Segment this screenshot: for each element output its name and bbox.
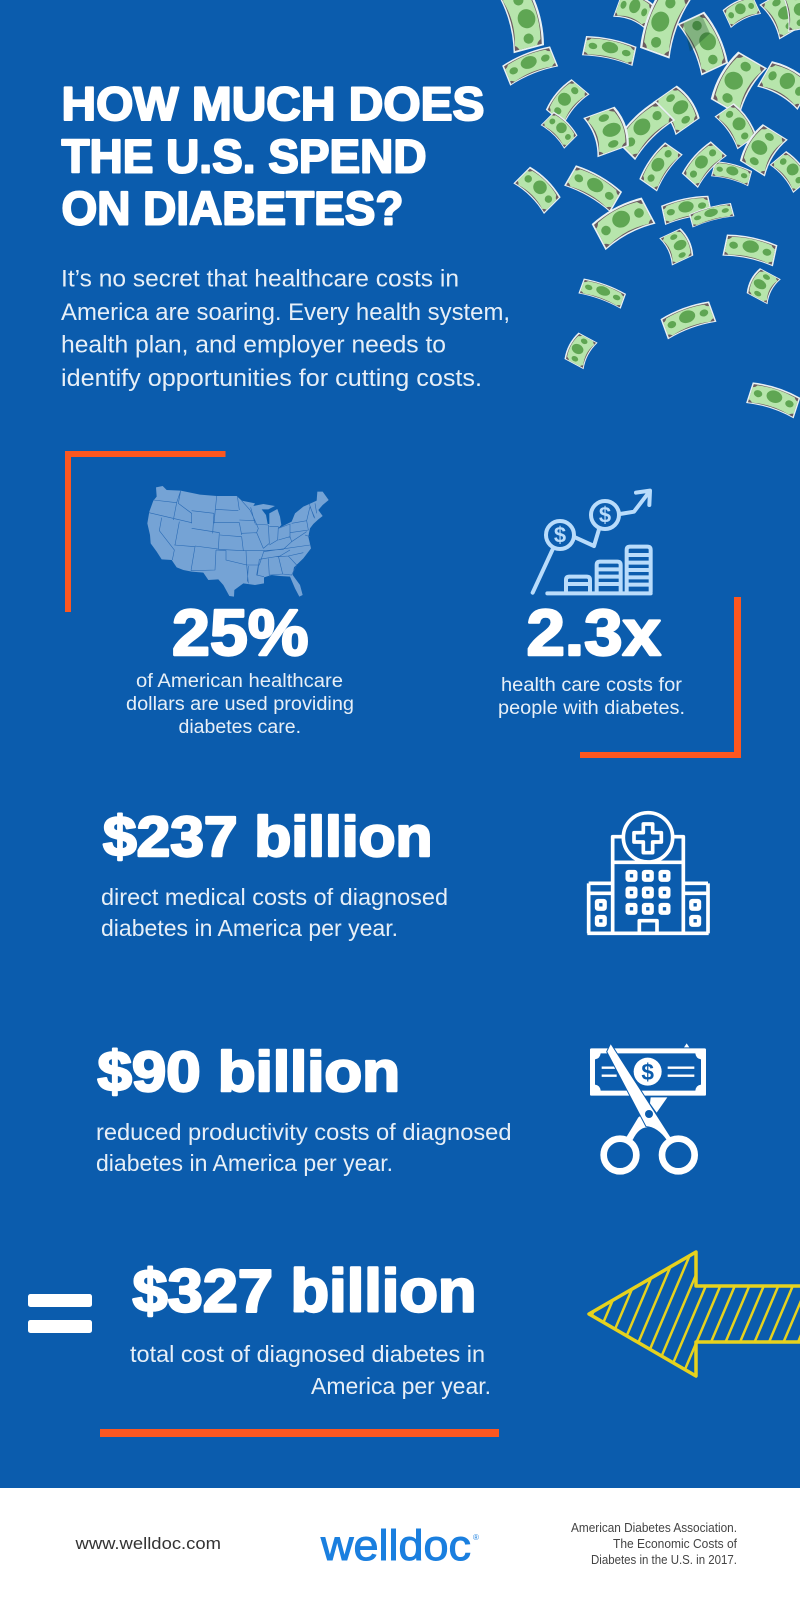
caption: 2.3x: people with diabetes. [498, 698, 685, 719]
source citation: The Economic Costs of [613, 1536, 737, 1551]
title: HOW MUCH DOES [62, 77, 484, 130]
icon: scissors cutting a bill: $ [641, 1059, 654, 1085]
intro text: health plan, and employer needs to [61, 332, 446, 359]
icon: rising costs chart [533, 491, 651, 593]
icon: US map [147, 486, 329, 597]
logo: welldoc: ® [473, 1533, 479, 1542]
source citation [571, 1520, 737, 1567]
text: reduced productivity costs: diabetes in America per year. [96, 1150, 393, 1176]
icon: falling money [498, 0, 800, 418]
title: THE U.S. SPEND [62, 130, 426, 182]
caption: 25%: of American healthcare [136, 671, 343, 692]
title [62, 77, 484, 234]
stat: $90 billion: $90 billion [98, 1040, 400, 1104]
icon: rising costs chart: $ [554, 523, 566, 548]
text: direct medical costs [101, 884, 448, 941]
caption: 25% [126, 671, 354, 738]
stat: 2.3x: 2.3x [526, 596, 661, 669]
intro text: America are soaring. Every health system, [61, 299, 510, 326]
intro text [61, 266, 510, 392]
source citation: Diabetes in the U.S. in 2017. [591, 1552, 737, 1567]
orange underline [100, 1429, 499, 1437]
source citation: American Diabetes Association. [571, 1520, 737, 1535]
text: direct medical costs: direct medical costs of diagnosed [101, 884, 448, 910]
orange bracket: top left [65, 451, 226, 612]
title: ON DIABETES? [62, 182, 404, 234]
orange bracket: bottom right [580, 597, 741, 758]
icon: scissors cutting a bill [590, 1043, 706, 1171]
icon: equals sign [28, 1294, 92, 1333]
icon: yellow hatched arrow [587, 1250, 800, 1378]
website link: www.welldoc.com [74, 1534, 221, 1553]
text: direct medical costs: diabetes in America per year. [101, 915, 398, 941]
caption: 25%: diabetes care. [178, 717, 301, 738]
stat: $237 billion: $237 billion [103, 805, 432, 869]
intro text: It’s no secret that healthcare costs in [61, 266, 459, 293]
icon: hospital [587, 813, 709, 933]
stat: 25%: 25% [172, 596, 308, 669]
footer panel [0, 1488, 800, 1600]
stat: $327 billion: $327 billion [132, 1258, 476, 1324]
text: reduced productivity costs: reduced productivity costs of diagnosed [96, 1119, 511, 1145]
icon: rising costs chart: $ [599, 503, 611, 528]
caption: 2.3x: health care costs for [501, 675, 683, 696]
text: total cost: total cost of diagnosed diabetes in [130, 1341, 485, 1367]
text: reduced productivity costs [96, 1119, 511, 1176]
logo: welldoc: welldoc [320, 1522, 471, 1570]
text: total cost [130, 1341, 491, 1399]
caption: 25%: dollars are used providing [126, 694, 354, 715]
caption: 2.3x [498, 675, 685, 719]
intro text: identify opportunities for cutting costs. [61, 365, 482, 392]
text: total cost: America per year. [311, 1373, 491, 1399]
